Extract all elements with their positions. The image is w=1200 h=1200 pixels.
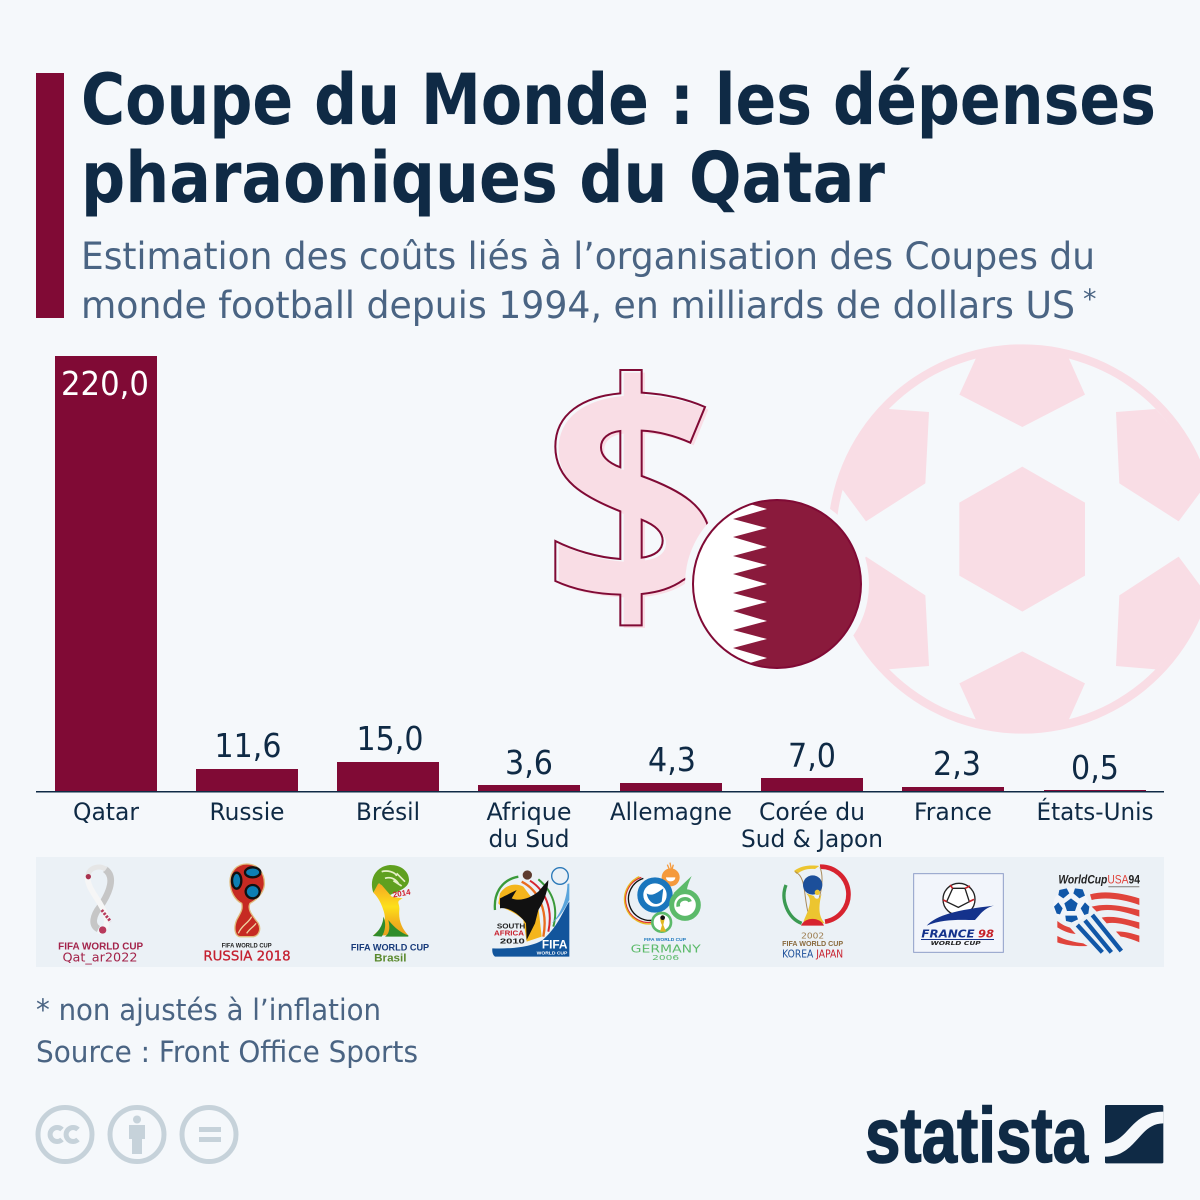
bar: Afrique du Sud: 3,6	[505, 743, 553, 782]
illustration: Qatar flag	[685, 499, 869, 669]
category labels	[73, 797, 1154, 853]
logo: Germany 2006: 2006	[652, 954, 679, 962]
logo: France 98	[914, 874, 1003, 952]
logo strip	[36, 857, 1164, 967]
bar: France: 2,3	[933, 744, 981, 783]
logo: Brasil 2014: 2014	[392, 887, 412, 899]
logo: Qatar 2022: Qat_ar2022	[62, 949, 137, 964]
bar: Brésil: 15,0	[356, 719, 424, 758]
category labels: Allemagne	[610, 798, 732, 826]
bar: Qatar	[55, 356, 157, 791]
category labels: Russie	[210, 798, 284, 826]
category labels: Brésil	[356, 798, 420, 826]
logo: Korea Japan 2002: 2002	[801, 930, 824, 940]
footnote and source: * non ajustés à l’inflation	[36, 993, 381, 1027]
logo: South Africa 2010: SOUTH	[497, 921, 526, 930]
bar: Afrique du Sud	[478, 743, 580, 791]
bar: États-Unis: 0,5	[1071, 748, 1119, 787]
bar: Corée du Sud et Japon: 7,0	[788, 736, 836, 775]
logo: Russia 2018: RUSSIA 2018	[203, 949, 291, 964]
subtitle: *	[1083, 284, 1096, 315]
bar: Brésil	[337, 719, 439, 791]
footnote and source: Source : Front Office Sports	[36, 1035, 418, 1069]
illustration: dollar sign	[555, 370, 713, 628]
logo: France 98: 98	[978, 928, 995, 941]
category labels: France	[914, 798, 992, 826]
logo: Brasil 2014: FIFA WORLD CUP	[351, 943, 429, 953]
bar: Qatar: 220,0	[61, 364, 149, 403]
logo: Germany 2006: GERMANY	[631, 943, 701, 956]
logo: South Africa 2010	[492, 868, 569, 957]
icon: creative commons	[38, 1108, 92, 1162]
logo: Germany 2006	[625, 863, 701, 962]
category labels: Corée du	[759, 798, 865, 826]
category labels: Sud & Japon	[741, 825, 883, 853]
bar: Corée du Sud et Japon	[761, 736, 863, 791]
accent bar	[36, 73, 64, 318]
bar chart	[36, 356, 1164, 853]
subtitle: Estimation des coûts liés à l’organisation des Coupes du	[81, 235, 1095, 278]
logo: South Africa 2010: WORLD CUP	[537, 950, 568, 956]
logo: South Africa 2010: 2010	[500, 936, 525, 945]
logo: Brasil 2014	[351, 865, 429, 965]
logo: France 98: WORLD CUP	[931, 941, 981, 947]
category labels: États-Unis	[1036, 797, 1154, 826]
logo: Brasil 2014: Brasil	[374, 953, 407, 965]
bar: France	[902, 744, 1004, 791]
category labels: Qatar	[73, 798, 139, 826]
logo: Qatar 2022: FIFA WORLD CUP	[58, 941, 144, 952]
logo: USA 94: WorldCupUSA94	[1058, 872, 1140, 886]
bar: États-Unis	[1044, 748, 1146, 791]
icon: no derivatives	[182, 1108, 236, 1162]
logo: South Africa 2010: FIFA	[542, 937, 568, 951]
bar: Allemagne: 4,3	[648, 740, 696, 779]
subtitle	[81, 235, 1096, 327]
logo: South Africa 2010: AFRICA	[494, 929, 524, 938]
icon: attribution	[110, 1108, 164, 1162]
logo: Korea Japan 2002: FIFA WORLD CUP	[782, 941, 844, 948]
subtitle: monde football depuis 1994, en milliards de dollars US	[81, 284, 1075, 327]
logo: France 98: FRANCE	[921, 928, 975, 941]
Statista logo: statista	[865, 1091, 1088, 1179]
logo: Russia 2018: FIFA WORLD CUP	[222, 943, 272, 949]
bar: Russie: 11,6	[214, 726, 282, 765]
logo: Germany 2006: FIFA WORLD CUP	[644, 937, 687, 943]
logo: Korea Japan 2002	[782, 866, 848, 961]
category labels: du Sud	[488, 825, 570, 853]
bar: Russie	[196, 726, 298, 791]
logo: Russia 2018	[203, 864, 291, 964]
logo: USA 94	[1053, 872, 1140, 952]
icon: Statista mark	[1105, 1105, 1163, 1163]
logo: Korea Japan 2002: KOREA JAPAN	[782, 948, 843, 961]
title: pharaoniques du Qatar	[81, 137, 885, 219]
logo: Qatar 2022	[58, 867, 144, 964]
axis line	[36, 791, 1164, 792]
footnote and source	[36, 993, 418, 1069]
title	[81, 59, 1156, 219]
illustration: football	[828, 344, 1200, 734]
licence icons	[38, 1108, 236, 1162]
category labels: Afrique	[486, 798, 572, 826]
bar: Allemagne	[620, 740, 722, 791]
